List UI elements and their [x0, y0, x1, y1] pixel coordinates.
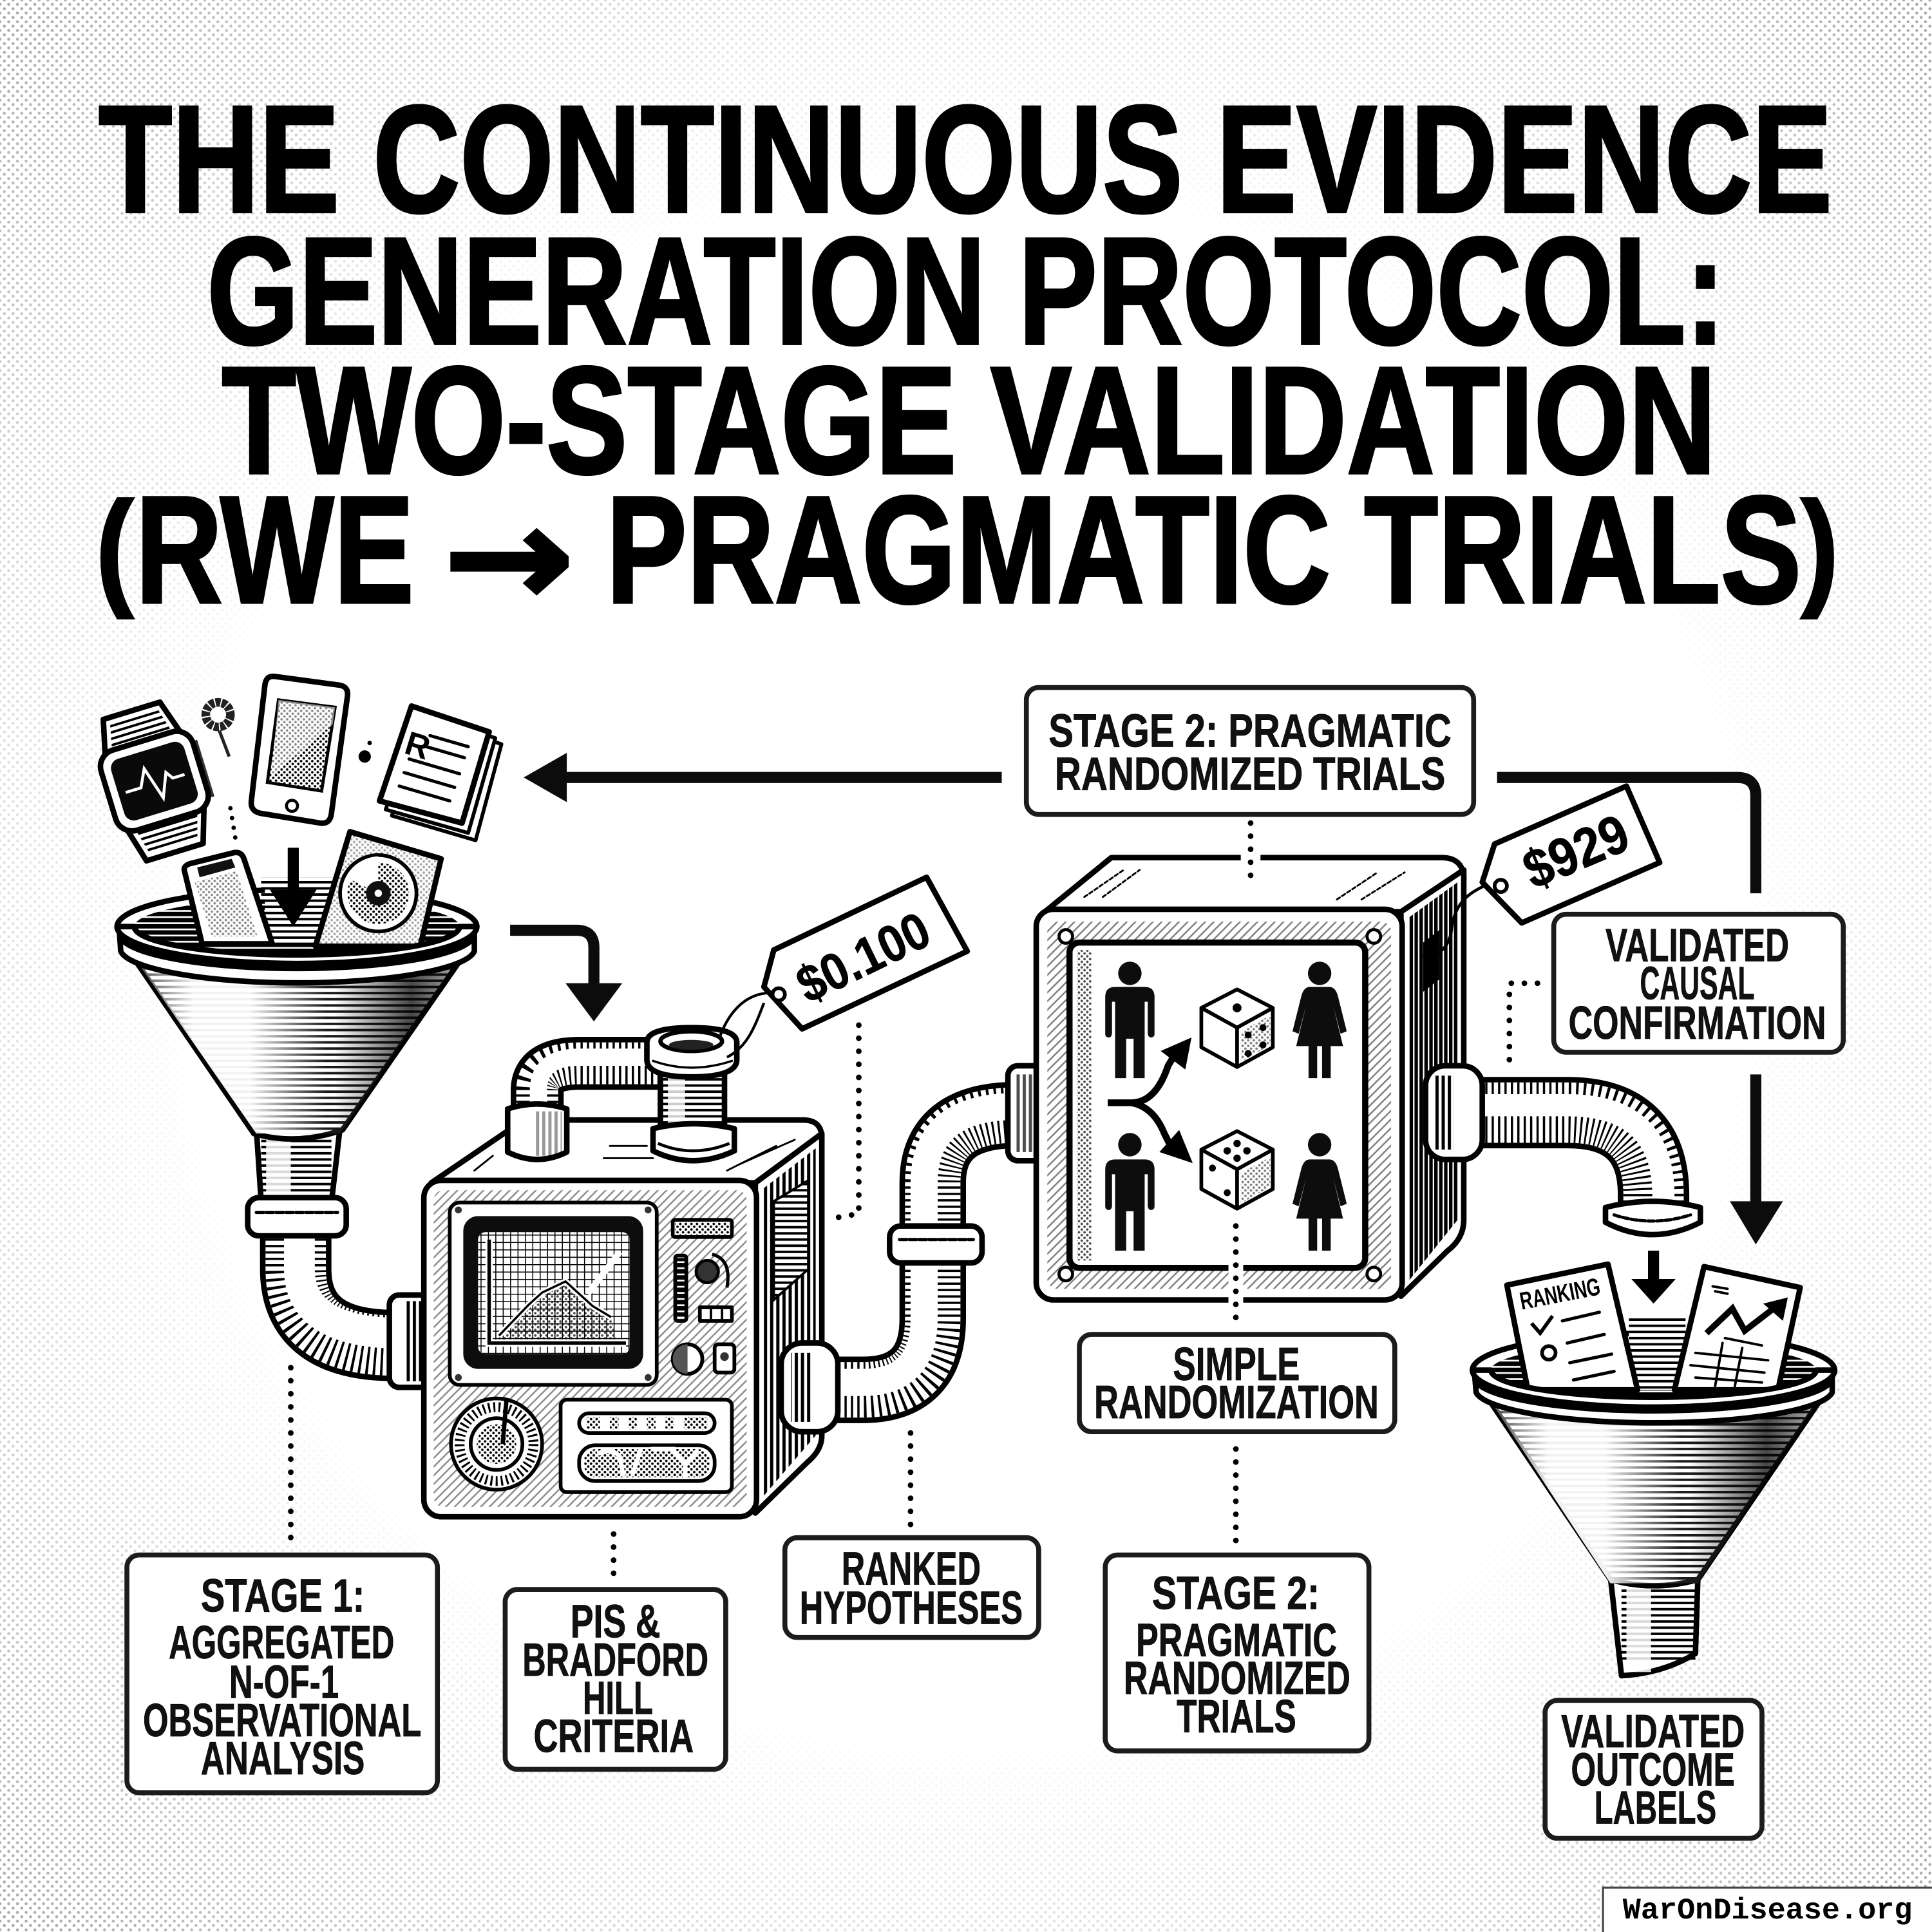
figures [1105, 961, 1347, 1251]
watermark [1603, 1888, 1932, 1932]
label: simple randomization: SIMPLE [1173, 1338, 1300, 1390]
funnel rim back [117, 889, 477, 963]
label: PIS and Bradford Hill: BRADFORD [522, 1634, 708, 1686]
dotted connector: ranked hypotheses [909, 1433, 912, 1530]
window panel [1070, 943, 1365, 1268]
funnel: validated outputs [1472, 1264, 1835, 1676]
icon: medical record papers: R [401, 724, 435, 766]
arrow: funnel to analyzer [510, 931, 622, 1021]
label: stage 2 lower: STAGE 2: [1152, 1567, 1320, 1620]
label: stage 2 lower [1105, 1555, 1369, 1751]
arrow: confirmation to outcome [1730, 1074, 1783, 1244]
display panel [561, 1399, 732, 1492]
label: validated causal confirmation: VALIDATED [1605, 919, 1789, 971]
trend chart paper [1674, 1267, 1800, 1390]
funnel neck and cone [135, 965, 460, 1195]
dotted connector: lower stage 2 [1235, 1449, 1237, 1545]
monitor with chart [450, 1202, 657, 1385]
elbow pipe: funnel to analyzer [248, 1198, 431, 1387]
box front face [1036, 909, 1402, 1300]
label: ranked hypotheses [785, 1538, 1039, 1638]
arrow: output into funnel [1631, 1251, 1676, 1303]
ranking paper: RANKING [1517, 1273, 1603, 1316]
label: stage 1: N-OF-1 [229, 1656, 339, 1708]
spout collar [1605, 1201, 1700, 1235]
outlet coupling [1426, 1066, 1482, 1159]
small phone in funnel [184, 853, 272, 944]
price tag: $0.100: $0.100 [788, 901, 940, 1014]
dotted connector: PIS [612, 1534, 615, 1582]
disc device in funnel [316, 831, 441, 946]
label: stage 2 lower: RANDOMIZED [1124, 1653, 1350, 1705]
pipe: analyzer to randomizer [781, 1066, 1045, 1432]
label: validated outcome labels [1545, 1700, 1762, 1839]
title: ( [96, 476, 133, 619]
valve column [647, 1028, 737, 1160]
overhead pipe with valve [507, 1028, 737, 1160]
machine top face [431, 1120, 822, 1183]
funnel rim front [117, 927, 477, 963]
pipe collar [248, 1198, 346, 1236]
small dots near icons [231, 741, 372, 838]
machine side face [755, 1133, 822, 1513]
title: → [444, 477, 574, 638]
box side face [1401, 870, 1464, 1296]
label: stage 1: STAGE 1: [201, 1570, 365, 1622]
funnel: data intake [117, 831, 477, 1202]
label: validated causal confirmation: CONFIRMATION [1569, 997, 1826, 1049]
label: stage 2 top [1027, 688, 1473, 815]
dotted connector: top stage 2 [1241, 823, 1260, 882]
label: validated outcome labels: LABELS [1595, 1782, 1716, 1834]
label: stage 1: ANALYSIS [201, 1732, 365, 1785]
down arrow into funnel [270, 848, 317, 927]
output pipe [1426, 1066, 1700, 1235]
label: PIS and Bradford Hill: CRITERIA [533, 1710, 694, 1763]
control cluster [673, 1220, 734, 1374]
label: PIS and Bradford Hill: PIS & [571, 1596, 661, 1648]
label: validated outcome labels: OUTCOME [1571, 1743, 1735, 1795]
ranking paper [1507, 1264, 1638, 1390]
label: simple randomization: RANDOMIZATION [1094, 1376, 1379, 1428]
dotted connector: simple randomization [1229, 1226, 1243, 1326]
label: PIS and Bradford Hill [505, 1589, 726, 1769]
label: stage 2 lower: PRAGMATIC [1136, 1614, 1337, 1666]
price tag: $929 [1423, 786, 1660, 956]
title: RWE [135, 465, 414, 636]
output coupling [781, 1343, 838, 1432]
title [96, 74, 1839, 638]
label: validated outcome labels: VALIDATED [1561, 1705, 1745, 1757]
icon: smartwatch [87, 695, 227, 866]
dotted connector: stage 1 [289, 1368, 292, 1540]
machine front face [424, 1180, 757, 1517]
label: stage 2 top: STAGE 2: PRAGMATIC [1048, 705, 1452, 757]
watermark: WarOnDisease.org [1623, 1894, 1912, 1927]
price tag: $0.100 [719, 877, 967, 1057]
icon: medical record papers [379, 706, 502, 840]
die top [1201, 989, 1273, 1067]
dotted connector: causal confirmation [1510, 983, 1548, 1059]
label: stage 1 [127, 1555, 437, 1793]
outlet funnel rim front [1472, 1370, 1835, 1407]
randomizer box [1036, 858, 1464, 1300]
label: stage 1: AGGREGATED [169, 1616, 394, 1669]
dial [451, 1399, 542, 1490]
label: stage 2 top: RANDOMIZED TRIALS [1055, 748, 1445, 800]
label: stage 1: OBSERVATIONAL [143, 1694, 421, 1747]
price tag: $929: $929 [1514, 802, 1638, 900]
outlet funnel cone and neck [1479, 1390, 1830, 1676]
label: validated causal confirmation [1554, 914, 1843, 1052]
dotted connector: price tag [838, 1025, 859, 1217]
label: validated causal confirmation: CAUSAL [1640, 958, 1754, 1010]
pipe stub [507, 1104, 567, 1159]
arrow: stage 2 to confirmation [1497, 777, 1756, 893]
icon: ring sensor [206, 703, 231, 757]
label: simple randomization [1079, 1334, 1395, 1432]
die bottom [1201, 1131, 1273, 1209]
label: ranked hypotheses: RANKED [842, 1542, 981, 1595]
riser collar [889, 1226, 982, 1263]
analyzer machine [424, 1120, 822, 1517]
label: stage 2 lower: TRIALS [1177, 1690, 1296, 1743]
label: ranked hypotheses: HYPOTHESES [800, 1582, 1023, 1634]
pipe coupling [390, 1295, 431, 1387]
title: ) [1801, 476, 1839, 619]
outlet funnel rim back [1472, 1333, 1835, 1407]
label: PIS and Bradford Hill: HILL [583, 1672, 653, 1724]
arrow: feedback to data sources [524, 753, 1001, 802]
inlet coupling [1008, 1066, 1045, 1160]
icon: large smartphone [251, 676, 348, 823]
box top face [1045, 858, 1464, 912]
split arrows [1108, 1037, 1193, 1163]
